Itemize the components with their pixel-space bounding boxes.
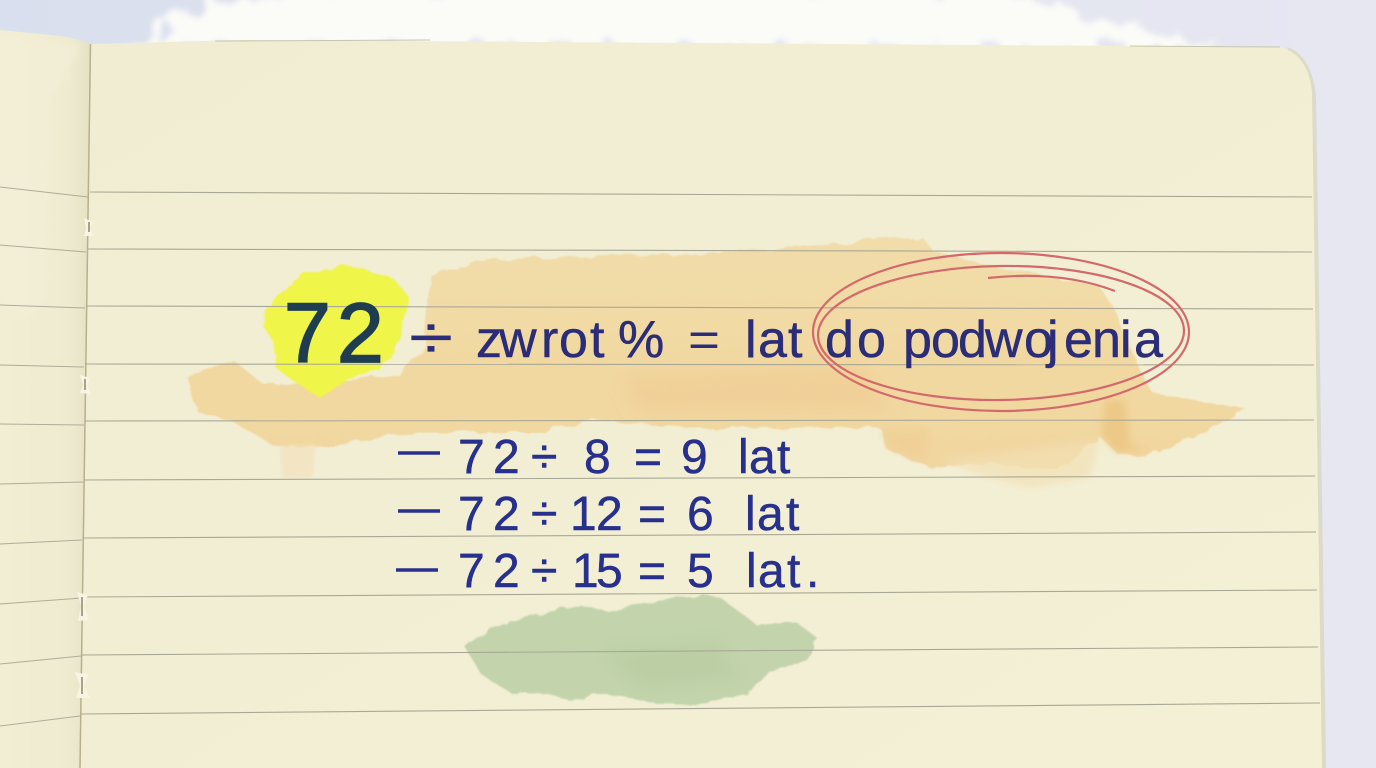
example 2: 72 ÷ 12 = 6 lat: [458, 488, 799, 541]
formula: zwrot percent: zwrot%: [476, 311, 664, 369]
left notebook page: [0, 30, 91, 768]
formula: division sign: ÷: [409, 304, 453, 371]
ruled lines: [81, 192, 1320, 714]
red circle around do podwojenia: [813, 253, 1189, 411]
page edge shadow: [1287, 47, 1326, 768]
orange watercolour wash: [187, 237, 1247, 488]
example 3: 72 ÷ 15 = 5 lat.: [458, 545, 819, 598]
green watercolour swatch: [465, 595, 817, 707]
formula: equals: =: [688, 314, 720, 367]
yellow highlighter behind 72: [262, 263, 407, 398]
formula: 72: 72: [284, 286, 384, 380]
formula: lat: lat: [745, 311, 803, 369]
formula: do podwojenia: do podwojenia: [825, 311, 1163, 369]
example 1: 72 ÷ 8 = 9 lat: [458, 431, 790, 484]
binding stitches: [75, 218, 94, 698]
